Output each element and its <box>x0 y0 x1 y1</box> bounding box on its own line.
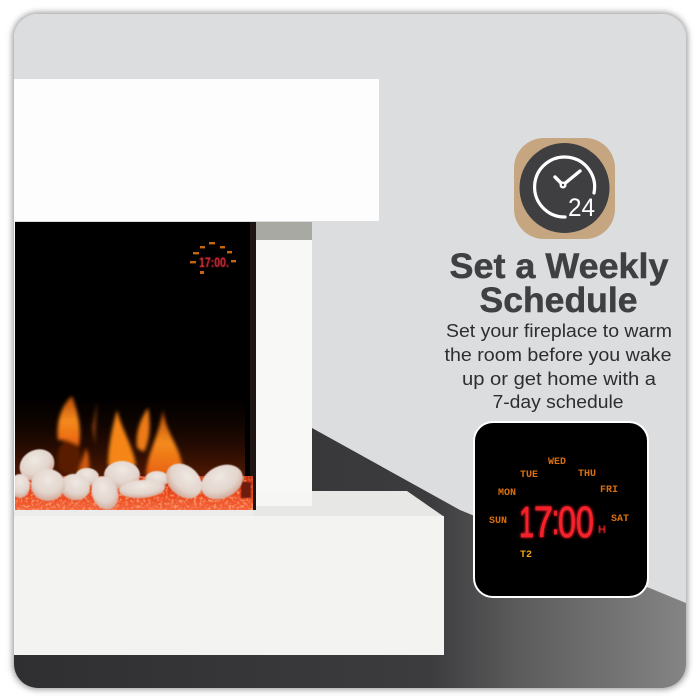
heading: Schedule <box>480 281 638 320</box>
digital display panel: T2 <box>520 550 532 561</box>
flames <box>58 396 183 478</box>
fireplace column <box>256 222 312 506</box>
digital display panel: 1 <box>519 498 534 547</box>
heading: Set a Weekly <box>450 247 669 286</box>
icon: 24 hour clock: 24 <box>568 194 595 222</box>
icon: 24 hour clock <box>514 138 615 239</box>
digital display panel: 0 <box>558 498 576 547</box>
digital display panel: WED <box>548 457 566 468</box>
digital display panel: THU <box>578 469 596 480</box>
body text: 7-day schedule <box>492 392 624 412</box>
stones <box>15 448 244 510</box>
body text <box>444 321 672 412</box>
heading <box>450 247 669 320</box>
digital display panel: MON <box>498 488 516 499</box>
digital display panel: : <box>552 495 559 544</box>
small fireplace display <box>190 242 236 274</box>
body text: the room before you wake <box>444 345 672 365</box>
digital display panel: TUE <box>520 470 538 481</box>
digital display panel: SAT <box>611 514 629 525</box>
digital display panel: 0 <box>576 498 594 547</box>
digital display panel <box>474 422 648 597</box>
body text: Set your fireplace to warm <box>446 321 672 341</box>
small fireplace display: 17:00. <box>199 254 229 270</box>
body text: up or get home with a <box>462 369 657 389</box>
digital display panel: FRI <box>600 485 618 496</box>
embers <box>15 476 253 510</box>
digital display panel: H <box>598 524 606 536</box>
dark floor <box>14 428 686 688</box>
firebox with flames and stones <box>10 222 256 513</box>
fireplace mantel shelf <box>14 79 379 221</box>
digital display panel: 7 <box>534 498 553 547</box>
fireplace base <box>14 221 444 655</box>
digital display panel: SUN <box>489 516 507 527</box>
